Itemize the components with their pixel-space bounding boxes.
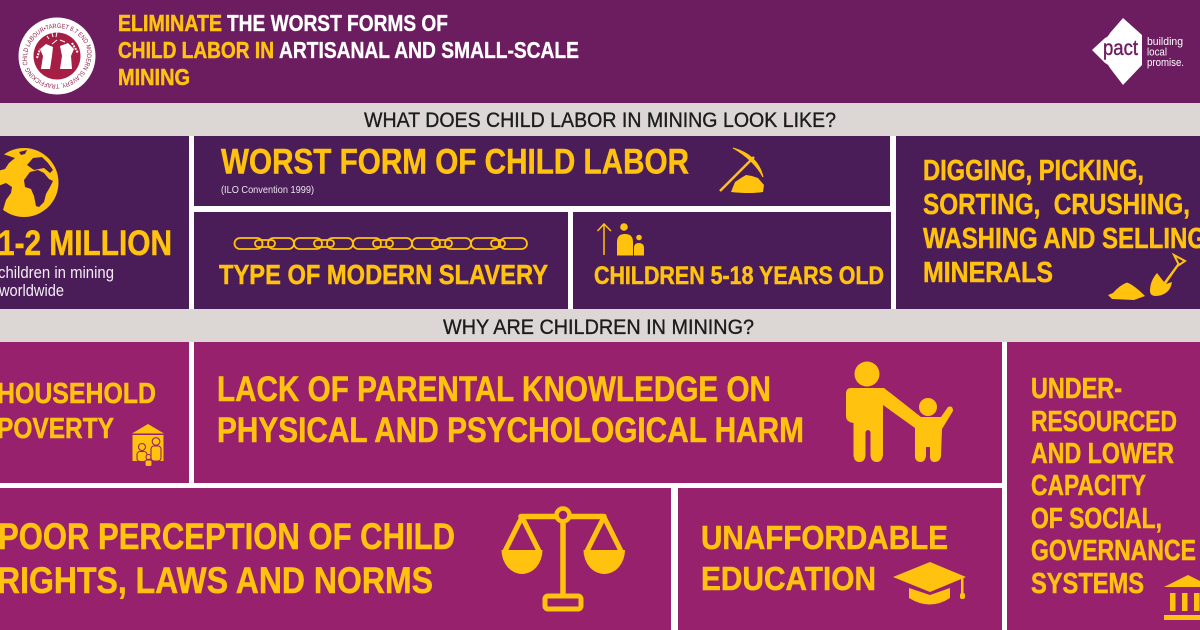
section band: why are children in mining — [0, 309, 1200, 342]
title — [118, 10, 579, 90]
panel: under-resourced: CAPACITY — [1031, 470, 1146, 502]
panel: worst form of child labor: WORST FORM OF CHILD LABOR — [221, 142, 689, 182]
section band: why are children in mining: WHY ARE CHILDREN IN MINING? — [443, 315, 754, 339]
panel: poor perception: POOR PERCEPTION OF CHILD — [0, 515, 455, 557]
panel: poor perception: RIGHTS, LAWS AND NORMS — [0, 559, 433, 601]
panel: 1-2 million — [0, 136, 189, 309]
title: ELIMINATE — [118, 10, 222, 36]
panel: lack of parental knowledge: LACK OF PARENTAL KNOWLEDGE ON — [217, 369, 771, 409]
panel: under-resourced: UNDER- — [1031, 373, 1122, 405]
icon: pact logo — [1092, 18, 1184, 85]
panel: type of modern slavery — [194, 212, 568, 309]
section band: what does child labor look like: WHAT DOES CHILD LABOR IN MINING LOOK LIKE? — [364, 108, 836, 132]
icon: scales — [502, 508, 625, 609]
panel: type of modern slavery: TYPE OF MODERN SLAVERY — [219, 259, 548, 290]
icon: shovel and pile — [1108, 255, 1185, 300]
panel: 1-2 million: children in mining — [0, 264, 114, 282]
panel: 1-2 million: worldwide — [0, 282, 64, 300]
icon: parent and child — [846, 362, 953, 462]
panel: poor perception — [0, 488, 671, 630]
panel: digging, picking — [896, 136, 1200, 309]
panel: lack of parental knowledge — [194, 342, 1002, 483]
panel: children 5-18 — [573, 212, 891, 309]
icon: target 8.7 logo — [18, 18, 96, 94]
icon: graduation cap — [893, 562, 966, 604]
icon: family house — [132, 424, 164, 466]
icon: pact logo: promise. — [1147, 57, 1184, 69]
panel: unaffordable education — [678, 488, 1002, 630]
icon: chain — [234, 238, 527, 249]
icon: institution building — [1164, 575, 1200, 620]
panel: household poverty — [0, 342, 189, 483]
panel: worst form of child labor: (ILO Convention 1999) — [221, 185, 314, 196]
panel: digging, picking: DIGGING, PICKING, — [923, 155, 1144, 187]
panel: household poverty: HOUSEHOLD — [0, 378, 156, 410]
panel: 1-2 million: 1-2 MILLION — [0, 224, 172, 263]
panel: digging, picking: MINERALS — [923, 257, 1053, 289]
title: ARTISANAL AND SMALL-SCALE — [279, 37, 579, 63]
title: MINING — [118, 64, 190, 90]
header band — [0, 0, 1200, 103]
panel: under-resourced: SYSTEMS — [1031, 568, 1144, 600]
icon: pact logo: building — [1147, 36, 1183, 48]
panel: unaffordable education: EDUCATION — [701, 560, 876, 597]
panel: children 5-18: CHILDREN 5-18 YEARS OLD — [594, 262, 884, 290]
panel: unaffordable education: UNAFFORDABLE — [701, 519, 948, 556]
title: CHILD LABOR IN — [118, 37, 274, 63]
icon: pickaxe and rocks — [720, 148, 764, 193]
icon: pact logo: local — [1147, 46, 1167, 58]
panel: lack of parental knowledge: PHYSICAL AND PSYCHOLOGICAL HARM — [217, 410, 804, 450]
panel: household poverty: POVERTY — [0, 413, 114, 445]
title: THE WORST FORMS OF — [227, 10, 448, 36]
icon: globe — [0, 148, 58, 217]
section band: what does child labor look like — [0, 103, 1200, 136]
panel: worst form of child labor — [194, 136, 890, 206]
panel: under-resourced: OF SOCIAL, — [1031, 503, 1162, 535]
panel: under-resourced — [1007, 342, 1200, 630]
icon: pact logo: pact — [1103, 37, 1138, 60]
icon: arrow and people — [598, 223, 644, 256]
